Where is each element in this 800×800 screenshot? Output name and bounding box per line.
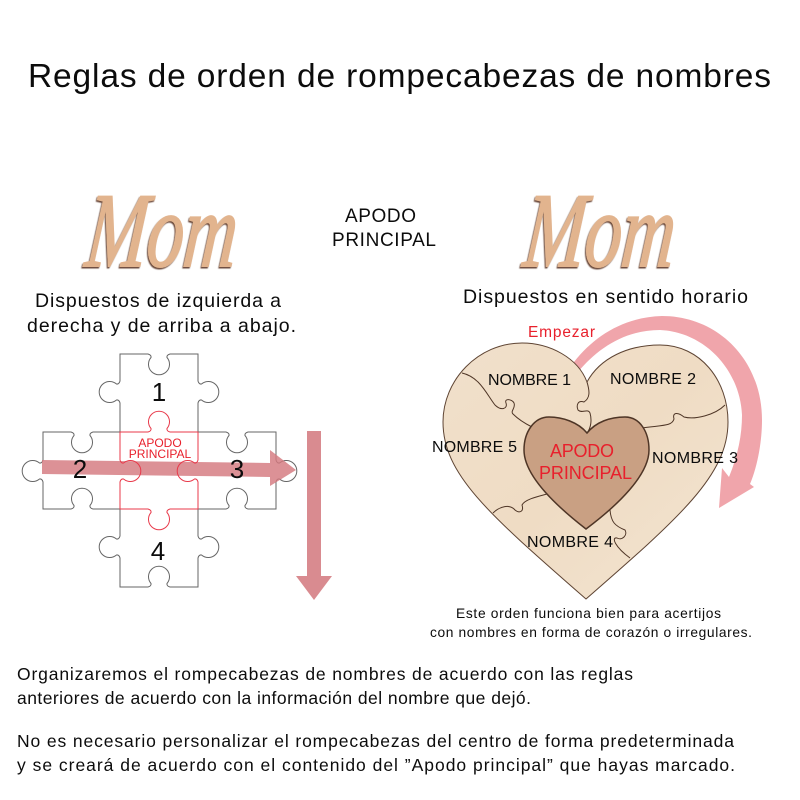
panel: cross puzzle diagram bbox=[22, 354, 297, 587]
puzzle piece 2 bbox=[22, 432, 120, 509]
heart caption bbox=[430, 606, 752, 640]
wooden heart bbox=[443, 343, 728, 599]
label: apodo principal: PRINCIPAL bbox=[332, 230, 436, 251]
arrow: left to right bbox=[42, 450, 296, 486]
arrow: clockwise bbox=[574, 316, 762, 508]
heart labels: NOMBRE 2 bbox=[610, 371, 696, 388]
piece numbers: 1 bbox=[152, 377, 166, 407]
centre puzzle piece bbox=[120, 411, 198, 530]
left order description: Dispuestos de izquierda a bbox=[35, 290, 281, 312]
piece numbers: 4 bbox=[151, 536, 165, 566]
left order description bbox=[27, 290, 296, 337]
note paragraph 1 bbox=[17, 664, 633, 708]
puzzle piece 3 bbox=[198, 432, 297, 509]
centre heart label: APODO bbox=[550, 441, 614, 461]
centre heart bbox=[524, 417, 649, 529]
arrow: top to bottom bbox=[296, 431, 332, 600]
note paragraph 1: anteriores de acuerdo con la información del nombre que dejó. bbox=[17, 688, 531, 708]
piece numbers: 3 bbox=[230, 454, 244, 484]
decorative word: Mom left: Mom bbox=[80, 172, 243, 289]
note paragraph 2 bbox=[17, 731, 735, 775]
centre piece label: PRINCIPAL bbox=[129, 447, 192, 461]
note paragraph 2: y se creará de acuerdo con el contenido del ”Apodo principal” que hayas marcado. bbox=[17, 755, 735, 775]
heart labels: NOMBRE 1 bbox=[488, 372, 571, 389]
piece numbers: 2 bbox=[73, 454, 87, 484]
note paragraph 2: No es necesario personalizar el rompecabezas del centro de forma predeterminada bbox=[17, 731, 734, 751]
heart caption: con nombres en forma de corazón o irregulares. bbox=[430, 625, 752, 640]
heart labels: NOMBRE 5 bbox=[432, 439, 517, 456]
label: apodo principal bbox=[332, 206, 436, 251]
centre heart label: PRINCIPAL bbox=[539, 463, 632, 483]
heart labels: NOMBRE 3 bbox=[652, 450, 738, 467]
start label: Empezar bbox=[528, 324, 595, 341]
puzzle piece 4 bbox=[99, 509, 219, 587]
piece numbers bbox=[73, 377, 244, 566]
centre piece label: APODO bbox=[138, 436, 182, 450]
puzzle piece 1 bbox=[99, 354, 219, 432]
decorative word: Mom right: Mom bbox=[518, 172, 681, 289]
label: apodo principal: APODO bbox=[345, 206, 416, 227]
note paragraph 1: Organizaremos el rompecabezas de nombres de acuerdo con las reglas bbox=[17, 664, 633, 684]
panel: heart puzzle bbox=[432, 316, 762, 599]
heart labels bbox=[432, 371, 738, 551]
heart labels: NOMBRE 4 bbox=[527, 534, 613, 551]
right order description: Dispuestos en sentido horario bbox=[463, 286, 748, 308]
centre heart label bbox=[539, 441, 632, 483]
left order description: derecha y de arriba a abajo. bbox=[27, 315, 296, 337]
heart caption: Este orden funciona bien para acertijos bbox=[456, 606, 721, 621]
title: Reglas de orden de rompecabezas de nombres bbox=[28, 58, 771, 95]
centre piece label bbox=[129, 436, 192, 461]
puzzle seams bbox=[462, 373, 725, 558]
